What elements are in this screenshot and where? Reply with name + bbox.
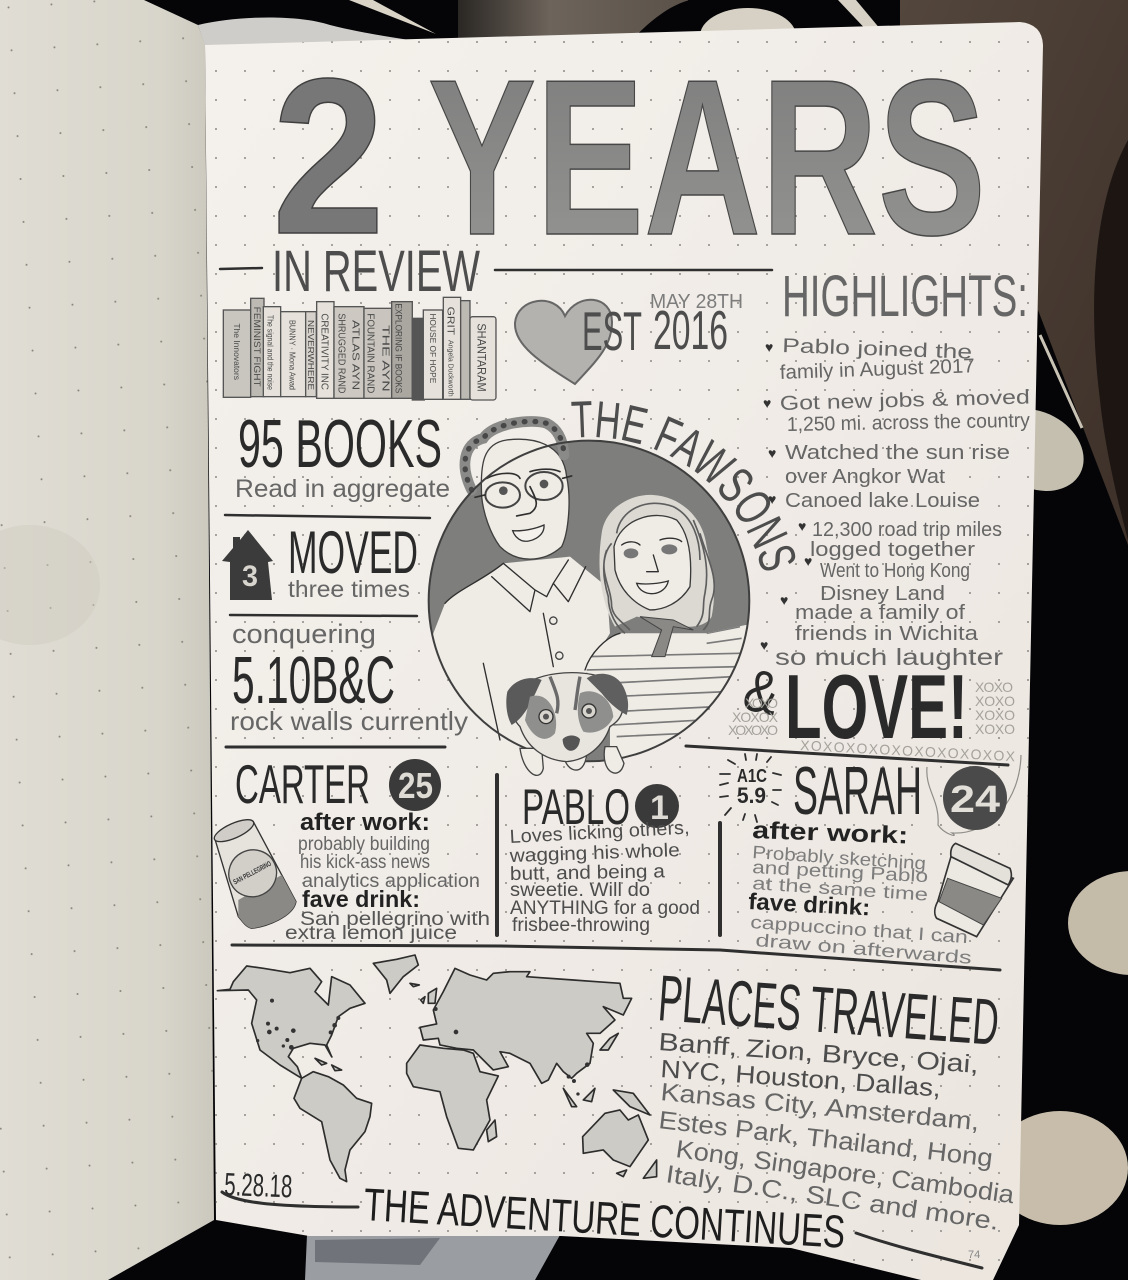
highlights list: over Angkor Wat bbox=[785, 466, 945, 488]
icon: shelf of books: The Innovators bbox=[232, 323, 242, 381]
places traveled: Banff, Zion, Bryce, Ojai, bbox=[658, 1028, 980, 1079]
carter profile: his kick-ass news bbox=[300, 852, 430, 873]
xoxo doodles: XOXOXOXOXOXOXOXOXOX bbox=[800, 737, 1016, 764]
pablo profile: butt, and being a bbox=[510, 861, 666, 885]
highlights list: Got new jobs & moved bbox=[780, 386, 1030, 415]
woman bbox=[584, 494, 746, 757]
icon: shelf of books: Angela Duckworth bbox=[447, 340, 456, 397]
highlights list: ♥ bbox=[804, 553, 812, 569]
sarah profile bbox=[720, 753, 1021, 968]
highlights list: ♥ bbox=[798, 518, 806, 534]
pablo profile: ANYTHING for a good bbox=[510, 898, 700, 919]
portrait circle outline bbox=[429, 441, 749, 761]
carter profile: fave drink: bbox=[302, 886, 420, 912]
highlights list: so much laughter bbox=[775, 644, 1003, 670]
divider between pablo and sarah bbox=[718, 823, 722, 935]
ampersand and love bbox=[738, 656, 968, 758]
stat: moved three times: 3 bbox=[242, 560, 258, 593]
xoxo doodles: XOXO bbox=[745, 695, 778, 711]
pablo profile: frisbee-throwing bbox=[512, 915, 650, 936]
stat: rock climbing grade: 5.10B&C bbox=[232, 643, 395, 718]
icon: san pellegrino can: SAN PELLEGRINO bbox=[232, 859, 273, 886]
world map bbox=[217, 955, 657, 1182]
carter profile: probably building bbox=[298, 834, 430, 855]
carter profile: extra lemon juice bbox=[285, 923, 457, 944]
icon: shelf of books: SHRUGGED RAND bbox=[335, 313, 346, 393]
pablo profile: Loves licking others, bbox=[509, 818, 690, 848]
subtitle: in review: IN REVIEW bbox=[272, 239, 480, 304]
africa bbox=[407, 1045, 498, 1150]
carter profile: after work: bbox=[300, 809, 430, 836]
stat: rock climbing grade bbox=[226, 619, 1008, 765]
badge: age 25: 25 bbox=[398, 765, 433, 806]
eurasia bbox=[420, 968, 632, 1096]
date stamp: 5.28.18 bbox=[224, 1166, 293, 1204]
icon: shelf of books: The signal and the noise bbox=[265, 315, 274, 390]
sarah profile: cappuccino that I can bbox=[750, 912, 969, 947]
pablo profile: wagging his whole bbox=[508, 840, 680, 867]
icon: heart with established date: EST bbox=[582, 300, 642, 362]
stat: moved three times bbox=[222, 519, 418, 616]
left notebook page bbox=[0, 0, 214, 1280]
places traveled bbox=[656, 961, 1016, 1236]
xoxo doodles: XOXO bbox=[975, 679, 1013, 695]
a1c burst: A1C bbox=[737, 766, 767, 786]
highlights list: Pablo joined the bbox=[782, 335, 972, 364]
a1c burst: 5.9 bbox=[737, 783, 766, 808]
footer banner: the adventure continues: 74 bbox=[968, 1249, 980, 1261]
a1c burst bbox=[720, 754, 781, 822]
icon: shelf of books: EXPLORING IF BOOKS bbox=[393, 303, 403, 393]
sarah profile: after work: bbox=[752, 817, 909, 849]
icon: shelf of books: GRIT bbox=[444, 307, 455, 335]
stat: moved three times: MOVED bbox=[288, 519, 418, 586]
places traveled: Kong, Singapore, Cambodia bbox=[674, 1135, 1016, 1209]
icon: heart with established date bbox=[515, 291, 743, 384]
divider between carter and pablo bbox=[495, 775, 499, 935]
carter profile: CARTER bbox=[235, 753, 370, 815]
badge: age 24 with thought bubble: 24 bbox=[950, 779, 1000, 821]
icon: shelf of books: BUNNY · Mona Awad bbox=[287, 320, 297, 390]
stat: moved three times: three times bbox=[288, 576, 410, 602]
title: 2 years bbox=[272, 33, 986, 282]
sarah profile: draw on afterwards bbox=[755, 930, 973, 968]
stat: rock climbing grade: rock walls currently bbox=[230, 706, 468, 736]
icon: heart with established date: MAY 28TH bbox=[650, 291, 743, 313]
carter profile: analytics application bbox=[302, 871, 480, 892]
highlights list: ♥ bbox=[765, 339, 773, 355]
ampersand and love: & bbox=[738, 656, 785, 728]
icon: san pellegrino can bbox=[212, 815, 296, 928]
sarah profile: Probably sketching bbox=[752, 842, 927, 874]
icon: shelf of books: HOUSE OF HOPE bbox=[428, 313, 437, 383]
badge: age 1: 1 bbox=[650, 789, 669, 827]
carter profile bbox=[212, 753, 490, 944]
section rule above map bbox=[232, 945, 1000, 970]
places traveled: Kansas City, Amsterdam, bbox=[659, 1078, 981, 1136]
highlights list: logged together bbox=[810, 539, 975, 561]
south america bbox=[294, 1072, 372, 1182]
highlights list: Watched the sun rise bbox=[785, 442, 1010, 464]
footer banner: the adventure continues: THE ADVENTURE CONTINUES bbox=[362, 1178, 847, 1258]
icon: coffee cup bbox=[935, 843, 1013, 937]
pablo profile: PABLO bbox=[522, 779, 630, 835]
highlights list: ♥ bbox=[768, 445, 776, 461]
man bbox=[427, 421, 610, 767]
sarah profile: fave drink: bbox=[748, 888, 871, 920]
xoxo doodles: XOXOX bbox=[732, 709, 779, 725]
xoxo doodles: XOXO bbox=[975, 707, 1015, 723]
highlights list: Canoed lake Louise bbox=[785, 490, 980, 512]
highlights list: family in August 2017 bbox=[779, 355, 975, 384]
australia and islands bbox=[315, 983, 657, 1178]
stat: 95 books: 95 BOOKS bbox=[238, 406, 442, 482]
stat: 95 books bbox=[225, 406, 450, 518]
right notebook page bbox=[205, 22, 1043, 1280]
icon: shelf of books bbox=[223, 297, 496, 400]
xoxo doodles: XOXO bbox=[975, 721, 1015, 737]
stat: rock climbing grade: conquering bbox=[232, 619, 376, 649]
icon: shelf of books: FEMINIST FIGHT bbox=[252, 307, 262, 387]
places traveled: NYC, Houston, Dallas, bbox=[660, 1055, 942, 1103]
dog bbox=[506, 673, 628, 775]
pablo profile: sweetie. Will do bbox=[510, 880, 650, 901]
highlights list: 12,300 road trip miles bbox=[812, 519, 1002, 541]
greenland bbox=[373, 955, 418, 993]
icon: shelf of books: SHANTARAM bbox=[474, 323, 488, 392]
portrait background circle bbox=[429, 441, 749, 761]
icon: shelf of books: FOUNTAIN RAND bbox=[365, 313, 376, 393]
icon: shelf of books: NEVERWHERE bbox=[306, 320, 315, 390]
pablo profile bbox=[508, 779, 700, 936]
highlights list: friends in Wichita bbox=[795, 623, 979, 645]
sarah profile: at the same time bbox=[752, 873, 929, 905]
highlights list: ♥ bbox=[760, 637, 768, 653]
highlights list: Went to Hong Kong bbox=[820, 560, 970, 582]
highlights list: ♥ bbox=[768, 491, 776, 507]
highlights list: ♥ bbox=[780, 592, 788, 608]
highlights list: 1,250 mi. across the country bbox=[787, 410, 1030, 436]
highlights list: made a family of bbox=[795, 602, 966, 624]
places traveled: Estes Park, Thailand, Hong bbox=[657, 1106, 994, 1173]
north america bbox=[217, 966, 365, 1078]
icon: shelf of books: ATLAS AYN bbox=[349, 320, 360, 390]
icon: shelf of books: THE AYN bbox=[380, 325, 391, 392]
highlights list: ♥ bbox=[763, 395, 771, 411]
badge: age 24 with thought bubble bbox=[927, 755, 1021, 835]
xoxo doodles: XOXOXO bbox=[728, 722, 778, 738]
highlights list: Disney Land bbox=[820, 583, 945, 605]
highlights list bbox=[760, 335, 1030, 670]
portrait of couple and dog bbox=[427, 421, 757, 775]
xoxo doodles: XOXO bbox=[975, 693, 1015, 709]
xoxo doodles bbox=[728, 679, 1016, 764]
places traveled: Italy, D.C., SLC and more. bbox=[664, 1160, 1001, 1236]
arc title: the fawsons: THE FAWSONS bbox=[571, 401, 796, 570]
ampersand and love: LOVE! bbox=[785, 657, 968, 758]
sarah profile: SARAH bbox=[793, 753, 922, 829]
badge: age 25 bbox=[389, 759, 441, 811]
sarah profile: and petting Pablo bbox=[752, 857, 929, 886]
carter profile: San pellegrino with bbox=[300, 909, 490, 930]
icon: shelf of books: CREATIVITY INC bbox=[318, 313, 329, 390]
badge: age 1 bbox=[635, 784, 679, 828]
stat: 95 books: Read in aggregate bbox=[235, 475, 450, 503]
title: 2 years: 2 bbox=[272, 33, 385, 281]
icon: heart with established date: 2016 bbox=[653, 299, 728, 361]
